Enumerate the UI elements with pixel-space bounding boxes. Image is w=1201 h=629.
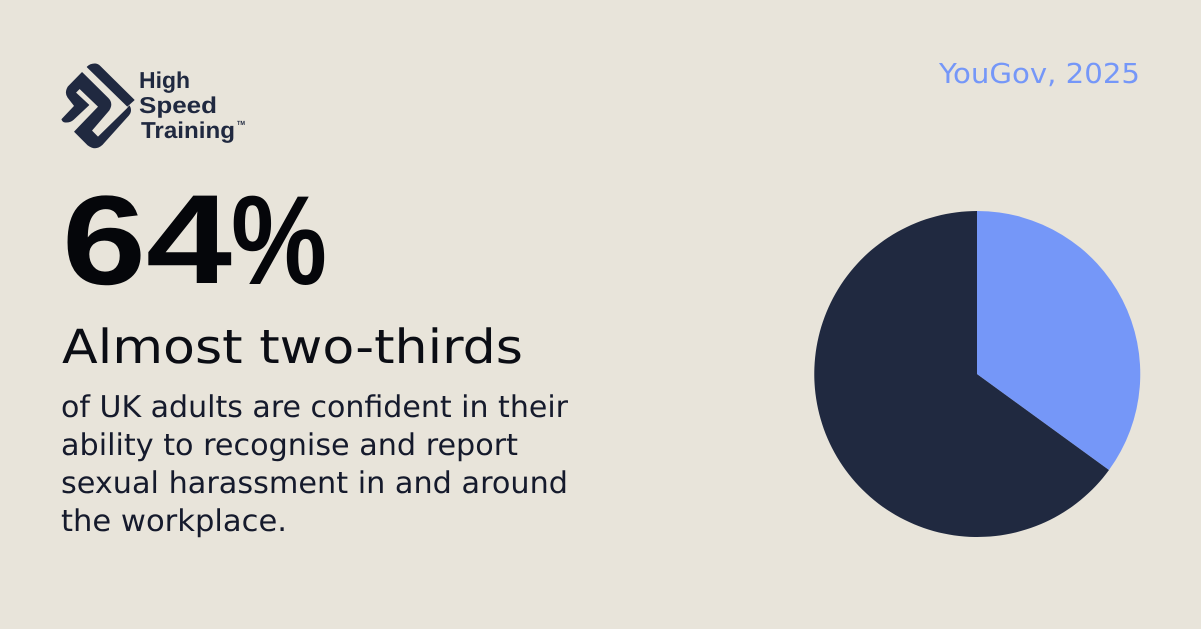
logo wordmark — [139, 67, 245, 143]
pie slice: 64% confident — [814, 211, 1109, 537]
body text — [61, 390, 569, 539]
big statistic: 64% — [62, 168, 327, 311]
logo wordmark: Training — [141, 117, 235, 143]
body text: ability to recognise and report — [61, 428, 518, 463]
icon: logo chevrons — [62, 64, 134, 148]
logo wordmark: High — [139, 67, 190, 93]
body text: the workplace. — [61, 504, 287, 539]
big statistic: 64%: 6 — [62, 169, 146, 311]
source: YouGov, 2025: YouGov, 2025 — [938, 58, 1140, 90]
logo wordmark: TM — [237, 120, 245, 127]
logo wordmark: Speed — [139, 92, 217, 118]
logo: High Speed Training — [62, 64, 245, 148]
pie slice: remaining 36% — [977, 211, 1140, 470]
body text: of UK adults are confident in their — [61, 390, 569, 425]
pie chart — [814, 211, 1140, 537]
big statistic: 64%: % — [231, 169, 327, 311]
big statistic: 64%: 4 — [146, 168, 232, 310]
body text: sexual harassment in and around — [61, 466, 568, 501]
heading: Almost two-thirds: Almost two-thirds — [62, 320, 523, 375]
